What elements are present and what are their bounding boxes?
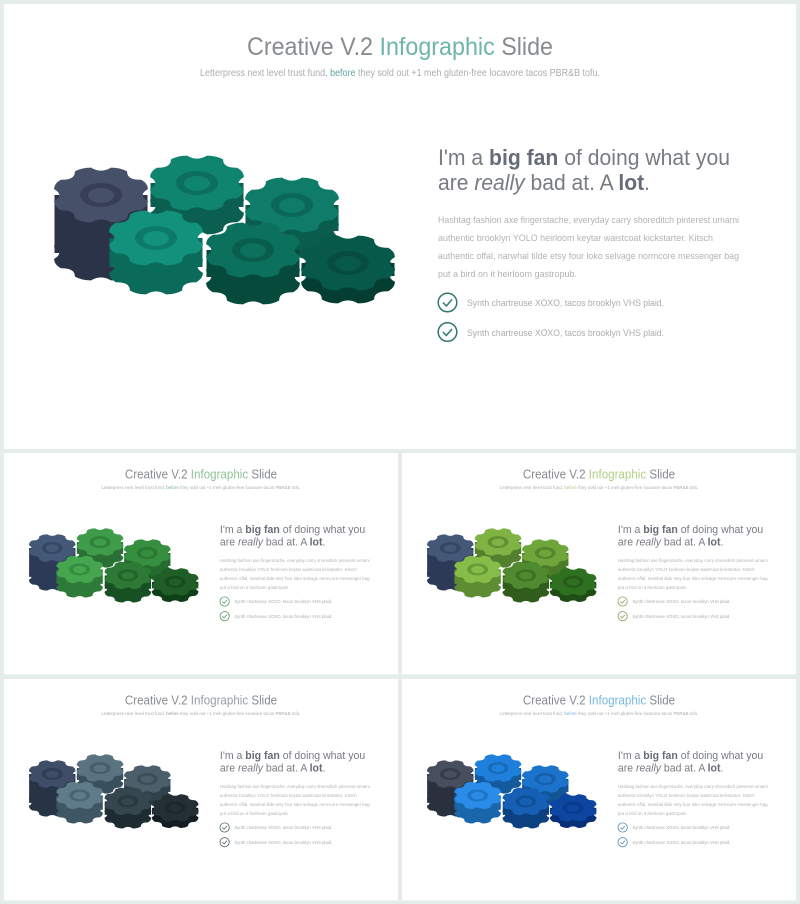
gear: olive 6 <box>550 568 596 602</box>
subtitle: Letterpress next level trust fund, before they sold out +1 meh gluten-free locavore tacos PBR&B tofu. <box>200 68 600 79</box>
gear cluster <box>29 528 198 602</box>
gear: blue 6 <box>550 794 596 828</box>
title: Creative V.2 Infographic Slide <box>247 33 553 61</box>
gear cluster <box>54 156 395 304</box>
checklist item 1 <box>618 597 730 606</box>
body text: authentic offal, narwhal tilde etsy four loko selvage normcore messenger bag <box>220 802 370 808</box>
heading <box>438 145 730 195</box>
gear: grey 3 <box>124 765 171 806</box>
body text: Hashtag fashion axe fingerstache, everyday carry shoreditch pinterest umami <box>618 558 768 564</box>
heading: are really bad at. A lot. <box>438 170 650 195</box>
body text: authentic brooklyn YOLO heirloom keytar waistcoat kickstarter. Kitsch <box>220 793 357 799</box>
gear: slate <box>29 760 76 817</box>
heading <box>220 524 365 549</box>
body text: authentic brooklyn YOLO heirloom keytar waistcoat kickstarter. Kitsch <box>438 233 713 244</box>
body text: put a bird on it heirloom gastropub. <box>618 585 687 591</box>
title: Creative V.2 Infographic Slide <box>523 693 675 707</box>
panel background <box>402 453 796 674</box>
gear: slate <box>427 534 474 591</box>
heading: are really bad at. A lot. <box>618 763 723 775</box>
checklist item 2: Synth chartreuse XOXO, tacos brooklyn VHS plaid. <box>234 840 332 846</box>
checklist item 2: Synth chartreuse XOXO, tacos brooklyn VHS plaid. <box>467 328 664 339</box>
checklist item 1: Synth chartreuse XOXO, tacos brooklyn VHS plaid. <box>632 825 730 831</box>
heading: I'm a big fan of doing what you <box>438 145 730 170</box>
gear: slate <box>427 760 474 817</box>
gear cluster <box>427 528 596 602</box>
body text: Hashtag fashion axe fingerstache, everyday carry shoreditch pinterest umami <box>220 784 370 790</box>
body text: put a bird on it heirloom gastropub. <box>618 811 687 817</box>
heading: I'm a big fan of doing what you <box>618 750 763 762</box>
body text <box>618 784 768 817</box>
title: Creative V.2 Infographic Slide <box>125 693 277 707</box>
heading: I'm a big fan of doing what you <box>618 524 763 536</box>
gear cluster <box>427 754 596 828</box>
body text: Hashtag fashion axe fingerstache, everyday carry shoreditch pinterest umami <box>618 784 768 790</box>
gear cluster <box>29 754 198 828</box>
heading <box>618 750 763 775</box>
gear: green 4 <box>56 556 103 597</box>
panel background <box>4 453 398 674</box>
slide: green variant <box>4 453 398 674</box>
gear: teal 6 <box>301 236 395 303</box>
body text: put a bird on it heirloom gastropub. <box>220 811 289 817</box>
gear: olive 2 <box>475 528 521 568</box>
checklist item 1 <box>220 597 332 606</box>
slide: blue variant <box>402 679 796 900</box>
checklist item 2 <box>618 612 730 621</box>
checklist item 2: Synth chartreuse XOXO, tacos brooklyn VHS plaid. <box>234 614 332 620</box>
body text <box>618 558 768 591</box>
gear: green 2 <box>77 528 123 568</box>
gear: blue 2 <box>475 754 521 794</box>
heading: are really bad at. A lot. <box>618 537 723 549</box>
body text: authentic offal, narwhal tilde etsy four loko selvage normcore messenger bag <box>618 576 768 582</box>
gear: slate <box>54 168 148 280</box>
body text: authentic offal, narwhal tilde etsy four loko selvage normcore messenger bag <box>438 251 739 262</box>
checklist item 2 <box>220 612 332 621</box>
body text: authentic brooklyn YOLO heirloom keytar waistcoat kickstarter. Kitsch <box>618 793 755 799</box>
gear: green 3 <box>124 539 171 580</box>
gear: grey 2 <box>77 754 123 794</box>
gear: grey 6 <box>152 794 198 828</box>
body text <box>220 784 370 817</box>
body text: put a bird on it heirloom gastropub. <box>438 269 577 280</box>
checklist item 1: Synth chartreuse XOXO, tacos brooklyn VHS plaid. <box>467 298 664 309</box>
body text: authentic offal, narwhal tilde etsy four loko selvage normcore messenger bag <box>220 576 370 582</box>
gear: teal 3 <box>245 178 339 258</box>
gear: teal 2 <box>150 156 244 234</box>
checklist item 1: Synth chartreuse XOXO, tacos brooklyn VHS plaid. <box>234 599 332 605</box>
heading: I'm a big fan of doing what you <box>220 750 365 762</box>
heading <box>618 524 763 549</box>
panel background <box>4 4 796 449</box>
gear: green 6 <box>152 568 198 602</box>
slide: slate variant <box>4 679 398 900</box>
checklist item 1 <box>438 293 664 312</box>
checklist item 1: Synth chartreuse XOXO, tacos brooklyn VHS plaid. <box>234 825 332 831</box>
checklist item 2: Synth chartreuse XOXO, tacos brooklyn VHS plaid. <box>632 840 730 846</box>
gear: teal 4 <box>109 211 203 294</box>
body text <box>438 215 739 280</box>
gear: blue 4 <box>454 782 501 823</box>
heading: I'm a big fan of doing what you <box>220 524 365 536</box>
title: Creative V.2 Infographic Slide <box>523 467 675 481</box>
checklist item 2 <box>220 838 332 847</box>
title: Creative V.2 Infographic Slide <box>125 467 277 481</box>
gear: teal 5 <box>206 223 300 304</box>
gear: olive 4 <box>454 556 501 597</box>
gear: grey 4 <box>56 782 103 823</box>
gear: olive 5 <box>503 562 549 602</box>
body text: Hashtag fashion axe fingerstache, everyday carry shoreditch pinterest umami <box>220 558 370 564</box>
slide: olive variant <box>402 453 796 674</box>
body text <box>220 558 370 591</box>
gear: slate <box>29 534 76 591</box>
subtitle: Letterpress next level trust fund, before they sold out +1 meh gluten-free locavore tacos PBR&B tofu. <box>500 485 699 491</box>
heading: are really bad at. A lot. <box>220 537 325 549</box>
body text: Hashtag fashion axe fingerstache, everyday carry shoreditch pinterest umami <box>438 215 739 226</box>
gear: blue 5 <box>503 788 549 828</box>
checklist item 1: Synth chartreuse XOXO, tacos brooklyn VHS plaid. <box>632 599 730 605</box>
gear: olive 3 <box>522 539 569 580</box>
subtitle: Letterpress next level trust fund, before they sold out +1 meh gluten-free locavore tacos PBR&B tofu. <box>102 711 301 717</box>
checklist item 2: Synth chartreuse XOXO, tacos brooklyn VHS plaid. <box>632 614 730 620</box>
panel background <box>4 679 398 900</box>
heading: are really bad at. A lot. <box>220 763 325 775</box>
gear: green 5 <box>105 562 151 602</box>
body text: authentic brooklyn YOLO heirloom keytar waistcoat kickstarter. Kitsch <box>618 567 755 573</box>
body text: authentic offal, narwhal tilde etsy four loko selvage normcore messenger bag <box>618 802 768 808</box>
checklist item 1 <box>220 823 332 832</box>
slide: teal main <box>4 4 796 449</box>
checklist item 1 <box>618 823 730 832</box>
panel background <box>402 679 796 900</box>
subtitle: Letterpress next level trust fund, before they sold out +1 meh gluten-free locavore tacos PBR&B tofu. <box>500 711 699 717</box>
body text: authentic brooklyn YOLO heirloom keytar waistcoat kickstarter. Kitsch <box>220 567 357 573</box>
checklist item 2 <box>438 323 664 341</box>
body text: put a bird on it heirloom gastropub. <box>220 585 289 591</box>
gear: grey 5 <box>105 788 151 828</box>
subtitle: Letterpress next level trust fund, before they sold out +1 meh gluten-free locavore tacos PBR&B tofu. <box>102 485 301 491</box>
checklist item 2 <box>618 838 730 847</box>
heading <box>220 750 365 775</box>
gear: blue 3 <box>522 765 569 806</box>
